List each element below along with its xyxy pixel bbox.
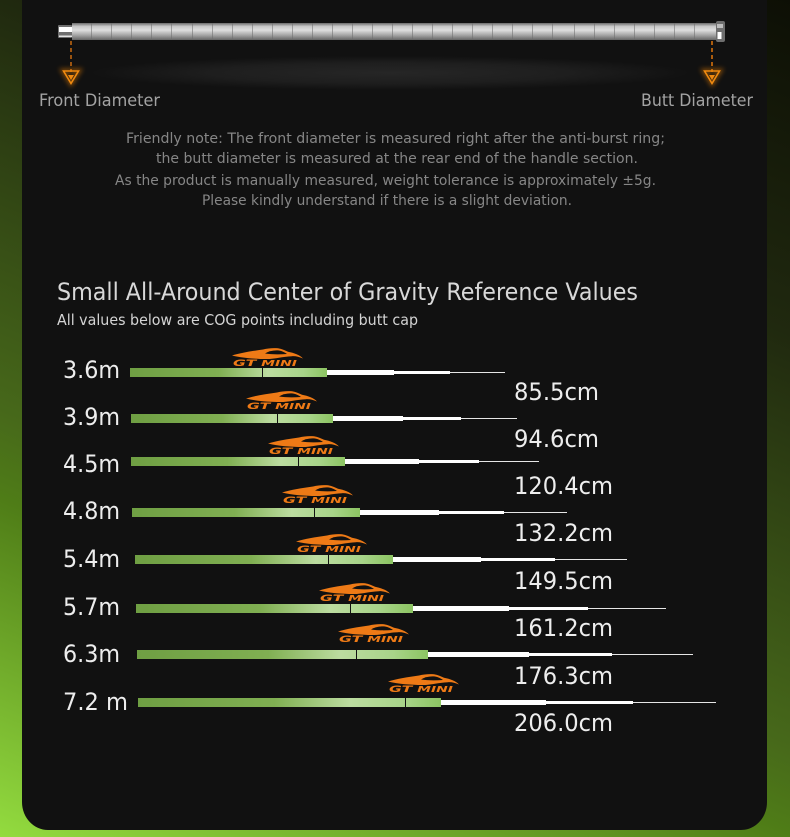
row: 3.9m — [63, 391, 599, 453]
row: 4.8m: 4.8m — [63, 497, 120, 525]
fishing rod illustration — [58, 21, 725, 42]
row: 3.6m: GT MINI — [233, 359, 297, 369]
front diameter arrow — [62, 41, 80, 84]
friendly note text block: As the product is manually measured, weight tolerance is approximately ±5g. — [115, 173, 656, 189]
section heading: Small All-Around Center of Gravity Reference Values — [57, 278, 638, 306]
row: 3.6m — [63, 348, 599, 406]
row: 3.9m: GT MINI — [247, 402, 311, 412]
row: 4.5m: 4.5m — [63, 450, 120, 478]
row: 7.2 m: 206.0cm — [514, 709, 613, 737]
row: 3.6m: 85.5cm — [514, 378, 599, 406]
rod shadow glow — [90, 56, 690, 90]
butt diameter arrow — [704, 41, 720, 84]
friendly note text block: Friendly note: The front diameter is measured right after the anti-burst ring; — [126, 131, 665, 147]
row: 5.7m: 5.7m — [63, 593, 120, 621]
row: 4.8m — [63, 485, 613, 547]
row: 5.4m — [63, 534, 627, 595]
row: 7.2 m — [63, 674, 716, 737]
section subheading: All values below are COG points including butt cap — [57, 311, 418, 329]
row: 5.4m: GT MINI — [297, 545, 361, 555]
row: 7.2 m: GT MINI — [389, 685, 453, 695]
front diameter label: Front Diameter — [39, 91, 160, 110]
row: 6.3m: GT MINI — [339, 635, 403, 645]
row: 4.8m: GT MINI — [283, 496, 347, 506]
butt diameter label: Butt Diameter — [641, 91, 753, 110]
row: 3.9m: 3.9m — [63, 403, 120, 431]
row: 6.3m: 6.3m — [63, 640, 120, 668]
row: 3.9m: 94.6cm — [514, 425, 599, 453]
row: 4.8m: 132.2cm — [514, 519, 613, 547]
row: 4.5m: 120.4cm — [514, 472, 613, 500]
row: 4.5m: GT MINI — [269, 447, 333, 457]
row: 5.7m — [63, 583, 666, 642]
row: 5.7m: 161.2cm — [514, 614, 613, 642]
row: 4.5m — [63, 436, 613, 500]
row: 6.3m — [63, 624, 693, 690]
row: 7.2 m: 7.2 m — [63, 688, 128, 716]
row: 5.4m: 149.5cm — [514, 567, 613, 595]
friendly note text block — [115, 131, 665, 209]
row: 5.4m: 5.4m — [63, 545, 120, 573]
friendly note text block: Please kindly understand if there is a slight deviation. — [202, 193, 572, 209]
friendly note text block: the butt diameter is measured at the rear end of the handle section. — [156, 151, 638, 167]
row: 6.3m: 176.3cm — [514, 662, 613, 690]
row: 5.7m: GT MINI — [320, 594, 384, 604]
row: 3.6m: 3.6m — [63, 356, 120, 384]
